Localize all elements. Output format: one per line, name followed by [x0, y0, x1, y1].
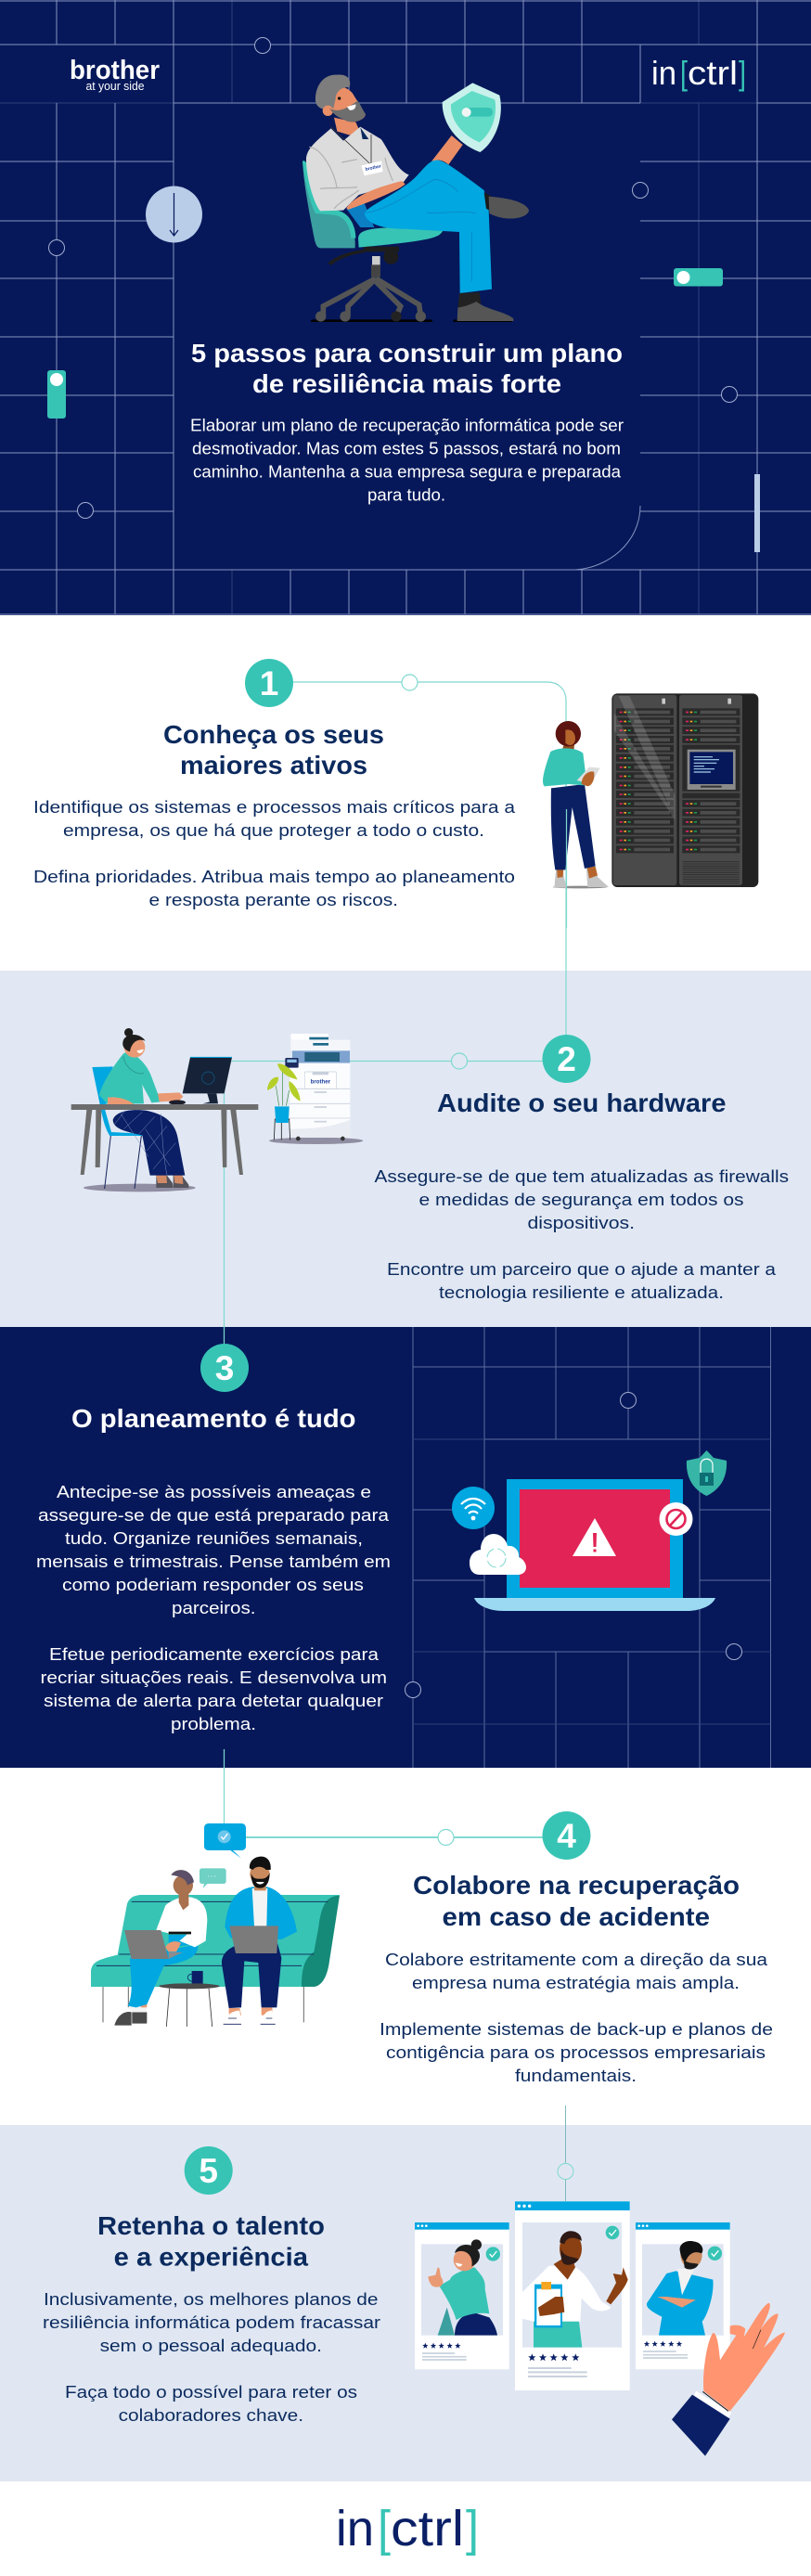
text: step 3: tudo. Organize reuniões semanais, — [65, 1529, 363, 1548]
panel: step 2 background — [0, 971, 811, 1327]
connector: step 4 horizontal — [246, 1830, 543, 1845]
card: left profile — [415, 2222, 509, 2369]
text: step 5: Inclusivamente, os melhores planos de — [44, 2290, 379, 2309]
badge: number 5 — [185, 2146, 233, 2195]
logo: in ctrl footer: in — [336, 2501, 374, 2557]
text: hero intro: desmotivador. Mas com estes 5 passos, estará no bom — [192, 440, 621, 458]
logo: in ctrl footer — [336, 2501, 479, 2557]
text: step 4: fundamentais. — [515, 2067, 637, 2085]
panel: step 5 background — [0, 2125, 811, 2481]
text: step 3: como poderiam responder os seus — [62, 1576, 364, 1594]
text: step 4 — [380, 1951, 773, 2085]
card: middle profile — [515, 2201, 630, 2390]
text: step 1 — [33, 798, 516, 909]
connector: step 3 to step 4 — [223, 1749, 225, 1823]
logo: brother: brother — [70, 56, 160, 85]
text: step 3: assegure-se de que está preparado para — [38, 1506, 390, 1525]
text: step 1: empresa, os que há que proteger a todo o custo. — [63, 821, 484, 840]
heading: step 3: O planeamento é tudo — [71, 1404, 356, 1433]
heading: step 1: Conheça os seus — [163, 720, 384, 749]
logo: in ctrl footer: ] — [466, 2501, 479, 2557]
badge: number 5: 5 — [199, 2152, 218, 2190]
heading: step 2: Audite o seu hardware — [437, 1088, 726, 1117]
text: step 1: Defina prioridades. Atribua mais tempo ao planeamento — [33, 868, 515, 886]
icon: toggle right — [674, 268, 723, 286]
decorative bar right — [754, 474, 760, 552]
logo: in ctrl top: ] — [739, 54, 746, 92]
logo: in ctrl top: ctrl — [688, 54, 738, 92]
text: step 4: Colabore estritamente com a direção da sua — [385, 1951, 768, 1969]
connector: top of step 3 — [223, 1327, 225, 1344]
icon: cloud — [470, 1534, 526, 1575]
badge: number 4: 4 — [557, 1817, 576, 1855]
icon: warning triangle — [573, 1518, 616, 1556]
logo: brother: at your side — [85, 80, 145, 93]
text: step 2: tecnologia resiliente e atualizada. — [439, 1283, 724, 1302]
badge: number 3: 3 — [215, 1349, 234, 1387]
text: step 2: dispositivos. — [527, 1214, 635, 1232]
illustration: woman at desk with printer — [71, 1028, 363, 1191]
connector: step 2 to step 3 — [225, 1053, 543, 1344]
heading: step 5 — [97, 2211, 325, 2272]
text: step 5: Faça todo o possível para reter os — [65, 2383, 357, 2402]
badge: number 2 — [542, 1035, 590, 1083]
heading: step 4: Colabore na recuperação — [413, 1871, 740, 1900]
logo: in ctrl footer: ctrl — [391, 2501, 464, 2557]
card: right profile — [636, 2222, 730, 2369]
text: hero intro: Elaborar um plano de recuperação informática pode ser — [190, 416, 624, 434]
badge: number 2: 2 — [557, 1040, 576, 1078]
icon: wifi — [452, 1487, 495, 1529]
heading: step 5: Retenha o talento — [97, 2211, 325, 2240]
illustration: laptop with alert — [452, 1450, 727, 1611]
logo: in ctrl top: in — [651, 54, 676, 92]
icon: hand — [672, 2303, 785, 2456]
panel: step 3 background — [0, 1327, 811, 1768]
text: step 3 — [36, 1483, 391, 1733]
text: step 4: empresa numa estratégia mais ampla. — [412, 1974, 740, 1992]
heading: hero title: 5 passos para construir um plano — [191, 339, 623, 367]
heading: step 4 — [413, 1871, 740, 1931]
logo: in ctrl top: [ — [680, 54, 688, 92]
badge: number 3 — [200, 1344, 249, 1392]
logo: in ctrl footer: [ — [378, 2501, 391, 2557]
panel: hero background — [0, 0, 811, 615]
logo: in ctrl top — [651, 54, 746, 92]
badge: number 4 — [542, 1811, 590, 1860]
text: hero intro — [190, 416, 624, 505]
text: hero intro: caminho. Mantenha a sua empresa segura e preparada — [193, 462, 622, 481]
icon: no entry — [659, 1502, 692, 1536]
badge: number 1 — [245, 659, 293, 707]
text: step 5: colaboradores chave. — [119, 2406, 303, 2425]
illustration: man with shield on chair — [303, 74, 529, 322]
connector: step 1 to step 2 — [293, 675, 566, 1035]
heading: step 1: maiores ativos — [180, 751, 367, 779]
illustration: candidate profile cards and hand — [415, 2201, 785, 2456]
text: hero intro: para tudo. — [367, 486, 445, 505]
illustration: woman at desk with printer: brother — [311, 1078, 330, 1085]
text: step 1: e resposta perante os riscos. — [148, 891, 398, 909]
text: step 4: contigência para os processos empresariais — [386, 2043, 766, 2062]
text: step 5: sem o pessoal adequado. — [100, 2337, 322, 2355]
text: step 3: Efetue periodicamente exercícios para — [49, 1645, 380, 1664]
icon: down arrow circle — [146, 186, 202, 243]
text: step 3: sistema de alerta para detetar qualquer — [44, 1692, 383, 1710]
heading: step 4: em caso de acidente — [442, 1902, 710, 1931]
heading: step 5: e a experiência — [114, 2243, 308, 2272]
icon: lock shield — [687, 1450, 727, 1496]
text: step 2: Assegure-se de que tem atualizadas as firewalls — [375, 1167, 789, 1186]
text: step 2: Encontre um parceiro que o ajude a manter a — [387, 1260, 777, 1279]
connector: step 4 to step 5 — [558, 2106, 573, 2201]
line over woman's trousers — [566, 809, 568, 928]
text: step 1: Identifique os sistemas e processos mais críticos para a — [33, 798, 516, 817]
text: step 3: problema. — [171, 1715, 256, 1733]
text: step 3: Antecipe-se às possíveis ameaças e — [57, 1483, 371, 1501]
badge: number 1: 1 — [260, 664, 278, 702]
text: step 5: resiliência informática podem fracassar — [43, 2313, 380, 2332]
text: step 5 — [43, 2290, 380, 2425]
stars: middle card — [528, 2353, 587, 2376]
heading: hero title — [191, 339, 623, 398]
text: step 2: e medidas de segurança em todos os — [419, 1191, 744, 1209]
illustration: man with shield on chair: brother — [365, 163, 382, 173]
illustration: two colleagues on sofa — [91, 1823, 340, 2027]
heading: hero title: de resiliência mais forte — [252, 369, 561, 398]
text: step 3: recriar situações reais. E desenvolva um — [41, 1668, 387, 1687]
text: step 4: Implemente sistemas de back-up e planos de — [380, 2020, 773, 2039]
text: step 2 — [375, 1167, 789, 1302]
heading: step 1 — [163, 720, 384, 779]
text: step 3: parceiros. — [172, 1599, 256, 1617]
icon: toggle left — [47, 370, 66, 419]
icon: speech bubble check — [204, 1823, 246, 1859]
illustration: server racks with woman — [543, 693, 758, 888]
text: step 3: mensais e trimestrais. Pense também em — [36, 1552, 391, 1571]
